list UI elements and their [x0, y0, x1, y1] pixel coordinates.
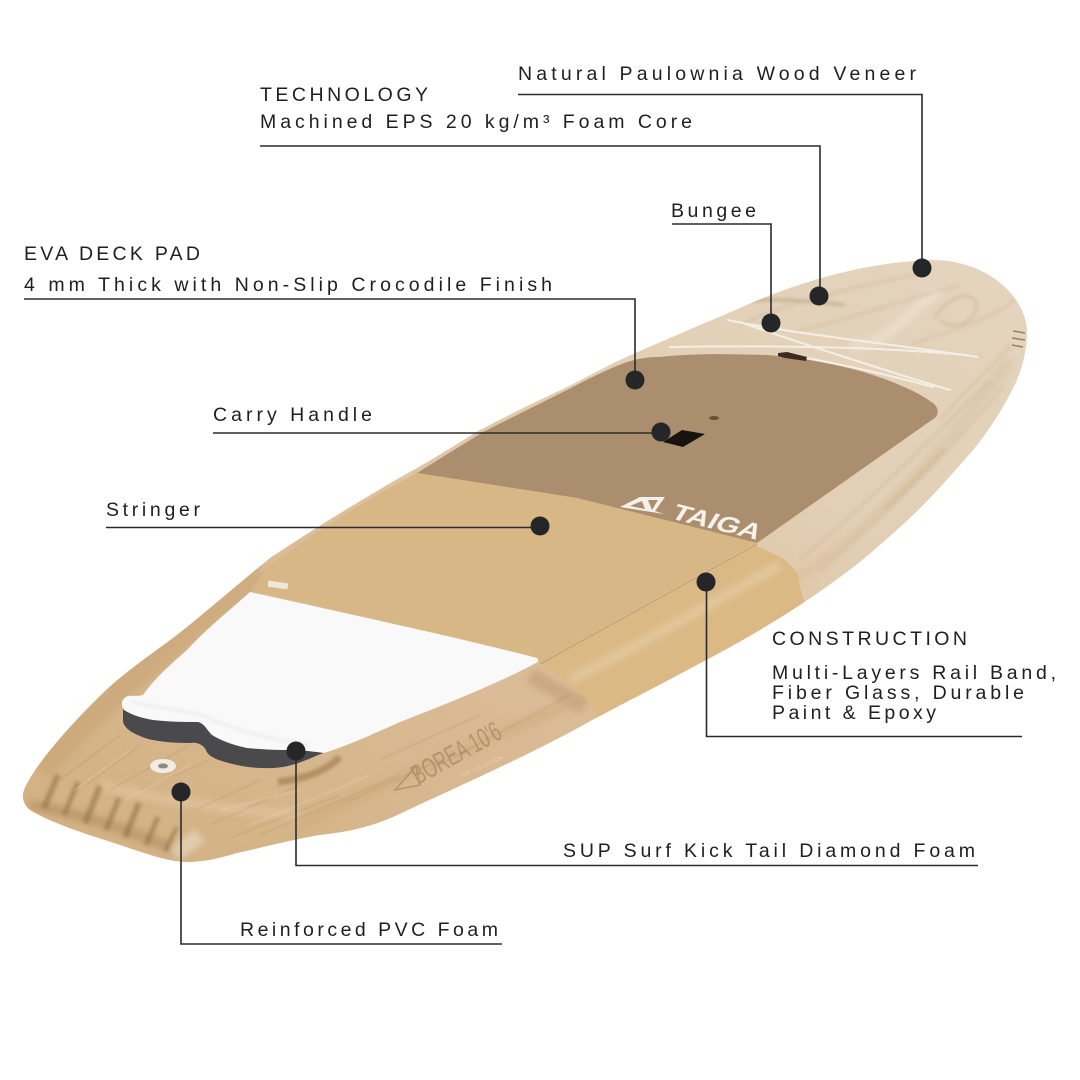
BOREA model print: [395, 716, 507, 790]
TAIGA logo: [620, 497, 768, 544]
bungee anchor: [778, 352, 807, 361]
stamp on tan pad: [268, 581, 288, 589]
BOREA model print: BOREA 10'6: [406, 716, 507, 790]
bungee cords: [670, 320, 977, 390]
tan pad seam: [540, 544, 757, 664]
callout: SUP Surf Kick Tail Diamond Foam: [286, 742, 978, 866]
callout: Bungee: [671, 200, 780, 332]
white pad shading: [132, 702, 310, 745]
nose model mark: [1012, 331, 1025, 347]
callout: Stringer: Stringer: [106, 499, 200, 521]
callout: Construction: Paint & Epoxy: [772, 702, 936, 724]
callout: Reinforced PVC Foam: Reinforced PVC Foam: [240, 919, 498, 941]
rail band highlight: [570, 565, 780, 680]
callout: EVA deck pad: 4 mm Thick with Non-Slip Crocodile Finish: [24, 274, 552, 296]
rail band: [540, 545, 810, 730]
callout: Technology: Machined EPS 20 kg/m³ Foam Core: [260, 111, 692, 133]
callout: Natural Paulownia Wood Veneer: [518, 63, 932, 278]
board wood body: [23, 260, 1027, 862]
nose grain: [740, 272, 930, 325]
callout: EVA deck pad: EVA DECK PAD: [24, 243, 200, 265]
callout: EVA deck pad: [24, 243, 644, 390]
deck pad: dark section: [417, 354, 938, 543]
callout: Construction: Fiber Glass, Durable: [772, 682, 1024, 704]
tail fine grain: [60, 695, 570, 838]
callout: Technology: TECHNOLOGY: [260, 84, 428, 106]
callout: Technology: [260, 84, 828, 306]
callout: Stringer: [106, 499, 550, 536]
wood grain: [30, 272, 1025, 855]
deck pad small hole: [709, 416, 719, 420]
callout: Bungee: Bungee: [671, 200, 756, 222]
BOREA model print: SUP COLLECTION: [460, 755, 504, 779]
tail end grain: [44, 775, 58, 808]
callout: Reinforced PVC Foam: [172, 782, 502, 944]
callout: Construction: [696, 572, 1056, 736]
TAIGA logo: TAIGA: [666, 500, 768, 544]
kick tail foam side: [123, 704, 326, 768]
callout: Construction: Multi-Layers Rail Band,: [772, 662, 1056, 684]
paddle board: [23, 260, 1027, 862]
callout: Carry Handle: Carry Handle: [213, 404, 372, 426]
carry handle opening: [663, 430, 705, 447]
white traction pad: [122, 592, 538, 753]
callout: Natural Paulownia Wood Veneer: Natural Paulownia Wood Veneer: [518, 63, 916, 85]
tail leash plug: [150, 759, 176, 773]
callout: SUP Surf Kick Tail Diamond Foam: SUP Surf Kick Tail Diamond Foam: [563, 840, 975, 862]
deck pad: tan section (stringer area): [250, 473, 757, 662]
callout: Construction: CONSTRUCTION: [772, 628, 967, 650]
rail grain: [800, 380, 990, 560]
callout: Carry Handle: [213, 404, 670, 442]
